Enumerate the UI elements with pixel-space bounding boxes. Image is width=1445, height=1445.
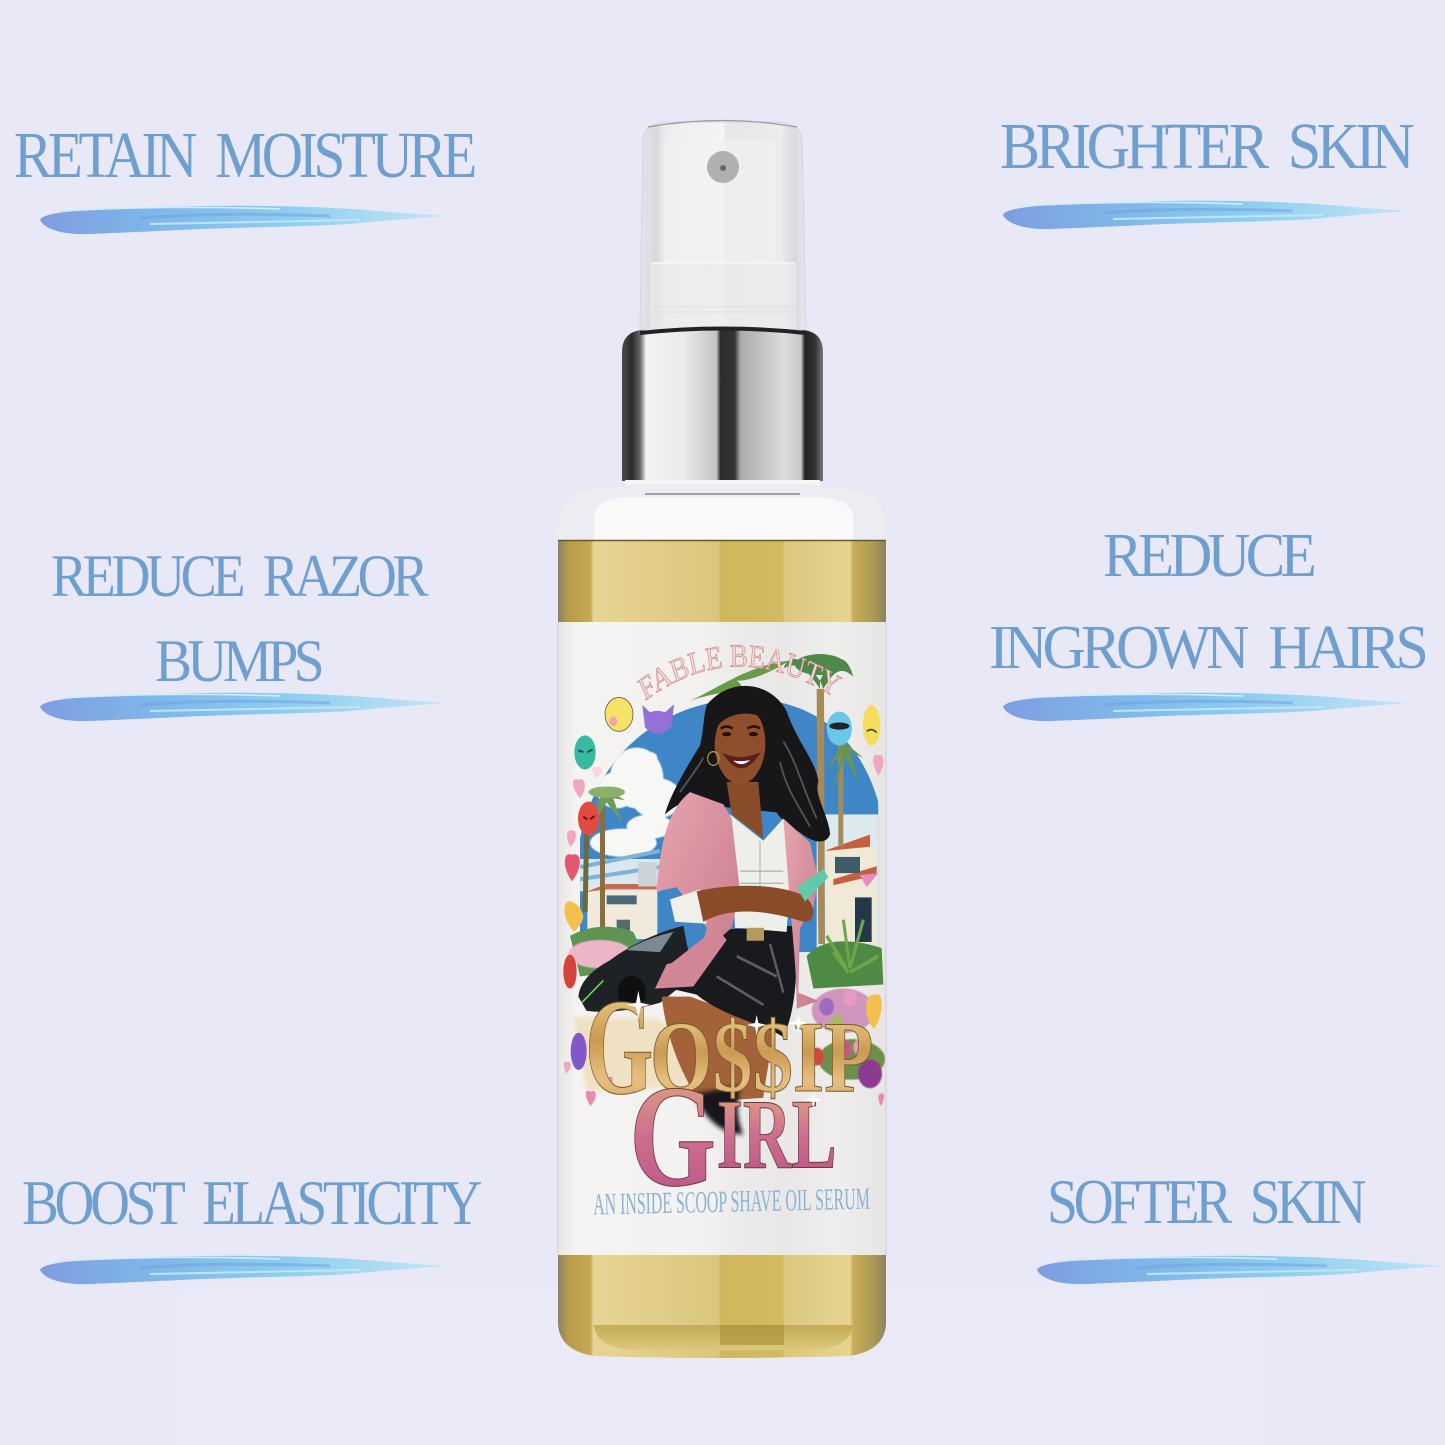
woman xyxy=(655,686,830,1134)
bottom lens xyxy=(594,1325,853,1350)
heading: brighter skin: BRIGHTER SKIN xyxy=(1000,110,1414,183)
neck ring xyxy=(625,480,820,488)
face xyxy=(715,703,765,784)
metal collar xyxy=(622,330,823,481)
benefit: softer skin xyxy=(1037,1166,1442,1284)
left houses xyxy=(585,862,657,939)
palm trees xyxy=(583,654,863,944)
brush stroke xyxy=(1003,693,1408,721)
sand ground xyxy=(573,1017,710,1092)
floor glow xyxy=(180,1290,1265,1445)
benefit: brighter skin xyxy=(1000,110,1414,229)
label xyxy=(558,622,886,1255)
bottom shadow band xyxy=(720,1325,784,1345)
heading: boost elasticity: BOOST ELASTICITY xyxy=(22,1167,481,1238)
heading: softer skin: SOFTER SKIN xyxy=(1047,1166,1365,1237)
brush stroke xyxy=(40,206,445,234)
hearts xyxy=(564,755,884,1106)
phone xyxy=(797,869,828,901)
benefit: reduce ingrown hairs xyxy=(989,522,1425,721)
product name: gossip xyxy=(585,972,873,1124)
shirt xyxy=(730,814,790,932)
brush stroke xyxy=(40,693,445,721)
bottle edge shading xyxy=(558,622,886,1255)
label artwork xyxy=(563,645,886,1222)
product name: girl xyxy=(629,1055,837,1217)
skirt xyxy=(662,926,796,1037)
heading: reduce: REDUCE xyxy=(1103,522,1314,590)
product name: girl: G xyxy=(629,1055,716,1217)
sparkles xyxy=(627,991,822,1108)
subtitle: AN INSIDE SCOOP SHAVE OIL SERUM xyxy=(593,1182,870,1222)
cuff xyxy=(670,889,707,924)
bottle body xyxy=(558,484,886,1358)
collar rim xyxy=(640,328,806,333)
brush stroke xyxy=(1003,201,1408,229)
shoulder inner highlight xyxy=(594,497,853,540)
front hair xyxy=(709,693,771,770)
forearm xyxy=(697,886,813,922)
right house xyxy=(827,835,877,948)
product name: girl: IRL xyxy=(717,1079,837,1189)
heading: bumps: BUMPS xyxy=(155,628,322,694)
skin chest xyxy=(727,782,763,839)
benefit: boost elasticity xyxy=(22,1167,481,1284)
sky scene xyxy=(577,697,883,956)
heading: retain moisture: RETAIN MOISTURE xyxy=(14,119,475,192)
product name: gossip: G xyxy=(585,972,653,1124)
leg xyxy=(662,997,771,1102)
sports car xyxy=(578,926,693,1012)
brush stroke xyxy=(1037,1256,1442,1284)
earring xyxy=(708,752,719,765)
foliage and flowers xyxy=(568,920,885,1088)
oil top line xyxy=(558,540,886,542)
brush stroke xyxy=(40,1256,445,1284)
benefit: reduce razor bumps xyxy=(40,543,445,721)
jacket right xyxy=(783,818,818,1009)
nozzle xyxy=(707,151,739,183)
emoji faces xyxy=(563,697,882,1070)
belt buckle xyxy=(747,928,764,941)
hair waves xyxy=(680,742,817,827)
product bottle xyxy=(557,120,887,1358)
benefit: retain moisture xyxy=(14,119,475,234)
heading: reduce razor: REDUCE RAZOR xyxy=(51,543,428,609)
product name: gossip: O$$IP xyxy=(650,1001,873,1114)
shoulder line xyxy=(645,493,800,495)
heading: ingrown hairs: INGROWN HAIRS xyxy=(989,614,1425,682)
hair back xyxy=(665,686,830,842)
jacket left xyxy=(655,792,740,989)
spray cap xyxy=(640,120,806,330)
lower shadow xyxy=(693,1086,743,1134)
clear shoulder xyxy=(558,484,886,540)
brand arc: fable beauty: FABLE BEAUTY xyxy=(636,645,842,701)
